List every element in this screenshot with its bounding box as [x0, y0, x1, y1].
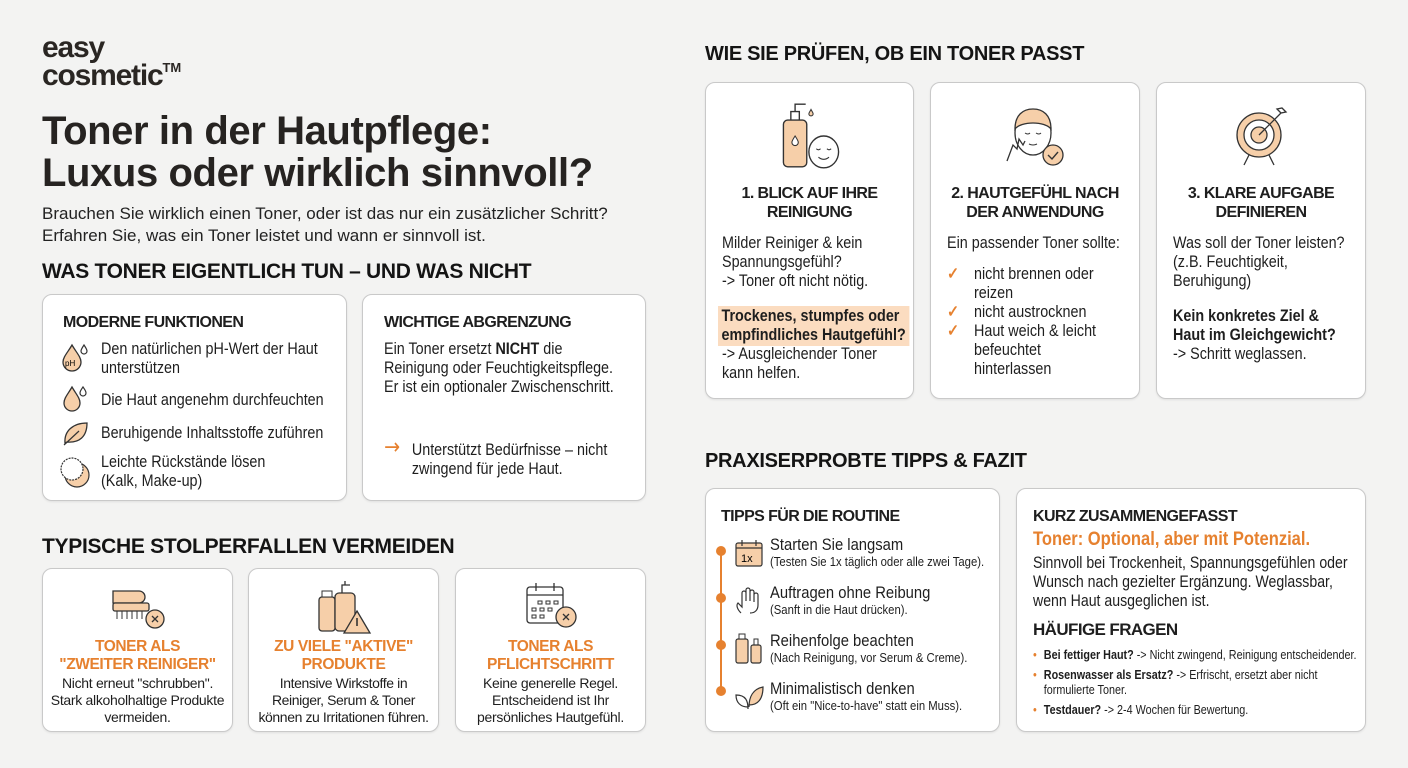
card title: DEFINIEREN — [1216, 204, 1306, 221]
card text 2 — [1173, 307, 1336, 363]
card text: -> Toner oft nicht nötig. — [722, 272, 868, 290]
card text — [477, 675, 624, 725]
card text 2: Kein konkretes Ziel & — [1173, 307, 1319, 325]
panel: step 1 — [705, 82, 914, 399]
text block — [384, 340, 614, 396]
text: durchfeuchten: Die Haut angenehm durchfeuchten — [101, 391, 324, 409]
card title: TONER ALS — [95, 638, 180, 655]
panel: zweiter reiniger — [42, 568, 233, 732]
checklist: nicht austrocknen — [974, 303, 1086, 321]
faq list: Bei fettiger Haut? -> Nicht zwingend, Reinigung entscheidender. — [1044, 647, 1357, 662]
card text — [258, 675, 429, 725]
faq list: • — [1033, 702, 1037, 717]
panel: fazit — [1016, 488, 1366, 732]
icon: bottles — [735, 634, 762, 664]
heading: wie sie prüfen: WIE SIE PRÜFEN, OB EIN TONER PASST — [705, 43, 1084, 65]
text: ph — [101, 340, 318, 377]
card text: Was soll der Toner leisten? — [1173, 234, 1345, 252]
card title — [1188, 185, 1334, 221]
text: rückstände: Leichte Rückstände lösen — [101, 453, 265, 471]
arrow note: → — [384, 435, 400, 460]
card title: 1. BLICK AUF IHRE — [742, 185, 877, 202]
panel: tipps — [705, 488, 1000, 732]
card title: 3. KLARE AUFGABE — [1188, 185, 1334, 202]
card text — [51, 675, 224, 725]
icon: cleanser and face — [782, 104, 840, 168]
text: beruhigend: Beruhigende Inhaltsstoffe zuführen — [101, 424, 323, 442]
card text: Keine generelle Regel. — [483, 675, 618, 691]
tip 1 — [770, 535, 984, 569]
tip 1: Starten Sie langsam — [770, 535, 903, 554]
card title: 2. HAUTGEFÜHL NACH — [951, 185, 1119, 202]
summary text: Sinnvoll bei Trockenheit, Spannungsgefühlen oder — [1033, 553, 1348, 572]
faq list — [1033, 647, 1357, 717]
text: ph: Den natürlichen pH-Wert der Haut — [101, 340, 318, 358]
title — [42, 109, 593, 195]
icon: leaf — [64, 422, 88, 446]
icon: sprout — [735, 686, 764, 709]
card text: Ein passender Toner sollte: — [947, 234, 1120, 252]
faq list: formulierte Toner. — [1044, 682, 1127, 697]
panel heading: TIPPS FÜR DIE ROUTINE — [721, 508, 900, 525]
card title — [274, 638, 413, 673]
card text: vermeiden. — [104, 709, 171, 725]
arrow note: Unterstützt Bedürfnisse – nicht — [412, 441, 607, 459]
icon: calendar 1x — [735, 540, 763, 567]
icon: calendar 1x: 1x — [741, 553, 753, 565]
panel: zu viele aktive — [248, 568, 439, 732]
faq list: • — [1033, 667, 1037, 682]
card title — [951, 184, 1119, 221]
card text: Reiniger, Serum & Toner — [272, 692, 415, 708]
title: Luxus oder wirklich sinnvoll? — [42, 151, 593, 195]
arrow note — [384, 435, 608, 478]
heading: praxis: PRAXISERPROBTE TIPPS & FAZIT — [705, 450, 1027, 472]
checklist — [947, 265, 1096, 378]
card text: persönliches Hautgefühl. — [477, 709, 624, 725]
faq list: Rosenwasser als Ersatz? -> Erfrischt, ersetzt aber nicht — [1044, 667, 1318, 682]
card text — [722, 234, 868, 290]
tip 3 — [770, 631, 967, 665]
tip 1: (Testen Sie 1x täglich oder alle zwei Tage). — [770, 554, 984, 569]
checklist: befeuchtet — [974, 341, 1041, 359]
text block: Reinigung oder Feuchtigkeitspflege. — [384, 359, 613, 377]
icon: cotton pads — [60, 457, 90, 488]
card text 2: -> Ausgleichender Toner — [722, 345, 877, 363]
highlight — [718, 306, 909, 346]
text block: Ein Toner ersetzt NICHT die — [384, 340, 562, 358]
checklist: reizen — [974, 284, 1013, 302]
icon: brush — [112, 590, 165, 629]
subtitle — [42, 204, 608, 245]
card title: PFLICHTSCHRITT — [487, 656, 614, 673]
timeline — [716, 546, 726, 696]
tip 2: Auftragen ohne Reibung — [770, 583, 930, 602]
title: Toner in der Hautpflege: — [42, 109, 492, 153]
card text: (z.B. Feuchtigkeit, — [1173, 253, 1288, 271]
card text: Intensive Wirkstoffe in — [280, 675, 407, 691]
summary text: wenn Haut ausgeglichen ist. — [1033, 591, 1209, 610]
faq list: • — [1033, 647, 1037, 662]
logo — [42, 31, 181, 92]
tip 2 — [770, 583, 930, 617]
panel: moderne funktionen — [42, 294, 347, 501]
card text 2 — [722, 345, 877, 382]
panel heading: MODERNE FUNKTIONEN — [63, 314, 243, 331]
card text 2: -> Schritt weglassen. — [1173, 345, 1307, 363]
panel: step 3 — [1156, 82, 1366, 399]
tip 3: Reihenfolge beachten — [770, 631, 914, 650]
checklist: hinterlassen — [974, 360, 1051, 378]
card text: Nicht erneut "schrubben". — [62, 675, 213, 691]
card title: "ZWEITER REINIGER" — [59, 656, 216, 673]
summary text: Wunsch nach gezielter Ergänzung. Weglassbar, — [1033, 572, 1333, 591]
checklist: Haut weich & leicht — [974, 322, 1096, 340]
faq list: Testdauer? -> 2-4 Wochen für Bewertung. — [1044, 702, 1248, 717]
logo: easy — [42, 31, 104, 64]
text: rückstände: (Kalk, Make-up) — [101, 472, 202, 490]
card text: können zu Irritationen führen. — [258, 709, 429, 725]
checklist: ✓ — [947, 322, 959, 340]
icon: calendar x — [526, 583, 577, 628]
icon: target — [1236, 107, 1288, 166]
heading: was toner tun: WAS TONER EIGENTLICH TUN – UND WAS NICHT — [42, 260, 531, 283]
arrow note: zwingend für jede Haut. — [412, 460, 563, 478]
faq heading: HÄUFIGE FRAGEN — [1033, 620, 1178, 639]
card text: Spannungsgefühl? — [722, 253, 842, 271]
card text: Entscheidend ist Ihr — [492, 692, 609, 708]
subtitle: Brauchen Sie wirklich einen Toner, oder ist das nur ein zusätzlicher Schritt? — [42, 204, 608, 223]
icon: ph drop — [62, 344, 88, 372]
heading: stolperfallen: TYPISCHE STOLPERFALLEN VERMEIDEN — [42, 535, 454, 558]
card title: TONER ALS — [508, 638, 593, 655]
tip 4: (Oft ein "Nice-to-have" statt ein Muss). — [770, 698, 962, 713]
text block: Er ist ein optionaler Zwischenschritt. — [384, 378, 614, 396]
icon: bottles warning — [318, 581, 372, 634]
card title: PRODUKTE — [302, 656, 385, 673]
checklist: ✓ — [947, 265, 959, 283]
highlight: empfindliches Hautgefühl? — [721, 326, 906, 344]
tip 3: (Nach Reinigung, vor Serum & Creme). — [770, 650, 967, 665]
text: rückstände — [101, 453, 265, 490]
card text — [1173, 234, 1345, 290]
orange statement: Toner: Optional, aber mit Potenzial. — [1033, 529, 1310, 550]
summary text — [1033, 553, 1348, 610]
panel heading: WICHTIGE ABGRENZUNG — [384, 314, 571, 331]
checklist: nicht brennen oder — [974, 265, 1094, 283]
icon: ph drop: pH — [65, 359, 75, 368]
icon: drop — [63, 386, 87, 412]
panel: abgrenzung — [362, 294, 646, 501]
card text: Stark alkoholhaltige Produkte — [51, 692, 224, 708]
card title: REINIGUNG — [767, 204, 852, 221]
tip 4 — [770, 679, 962, 713]
logo: cosmeticTM — [42, 59, 181, 92]
card text: Milder Reiniger & kein — [722, 234, 862, 252]
checklist: ✓ — [947, 303, 959, 321]
card text 2: kann helfen. — [722, 364, 800, 382]
icon: face check — [1006, 108, 1064, 166]
panel heading: KURZ ZUSAMMENGEFASST — [1033, 508, 1237, 525]
card title — [487, 638, 614, 673]
icon: hand — [736, 587, 759, 614]
subtitle: Erfahren Sie, was ein Toner leistet und wann er sinnvoll ist. — [42, 226, 486, 245]
panel: step 2 — [930, 82, 1140, 399]
card text 2: Haut im Gleichgewicht? — [1173, 326, 1336, 344]
card title: ZU VIELE "AKTIVE" — [274, 638, 413, 655]
highlight: Trockenes, stumpfes oder — [721, 307, 899, 325]
card title: DER ANWENDUNG — [966, 204, 1104, 221]
tip 4: Minimalistisch denken — [770, 679, 915, 698]
text: ph: unterstützen — [101, 359, 180, 377]
panel: pflichtschritt — [455, 568, 646, 732]
card title — [742, 185, 878, 221]
card title — [59, 638, 216, 673]
tip 2: (Sanft in die Haut drücken). — [770, 602, 908, 617]
card text: Beruhigung) — [1173, 272, 1251, 290]
